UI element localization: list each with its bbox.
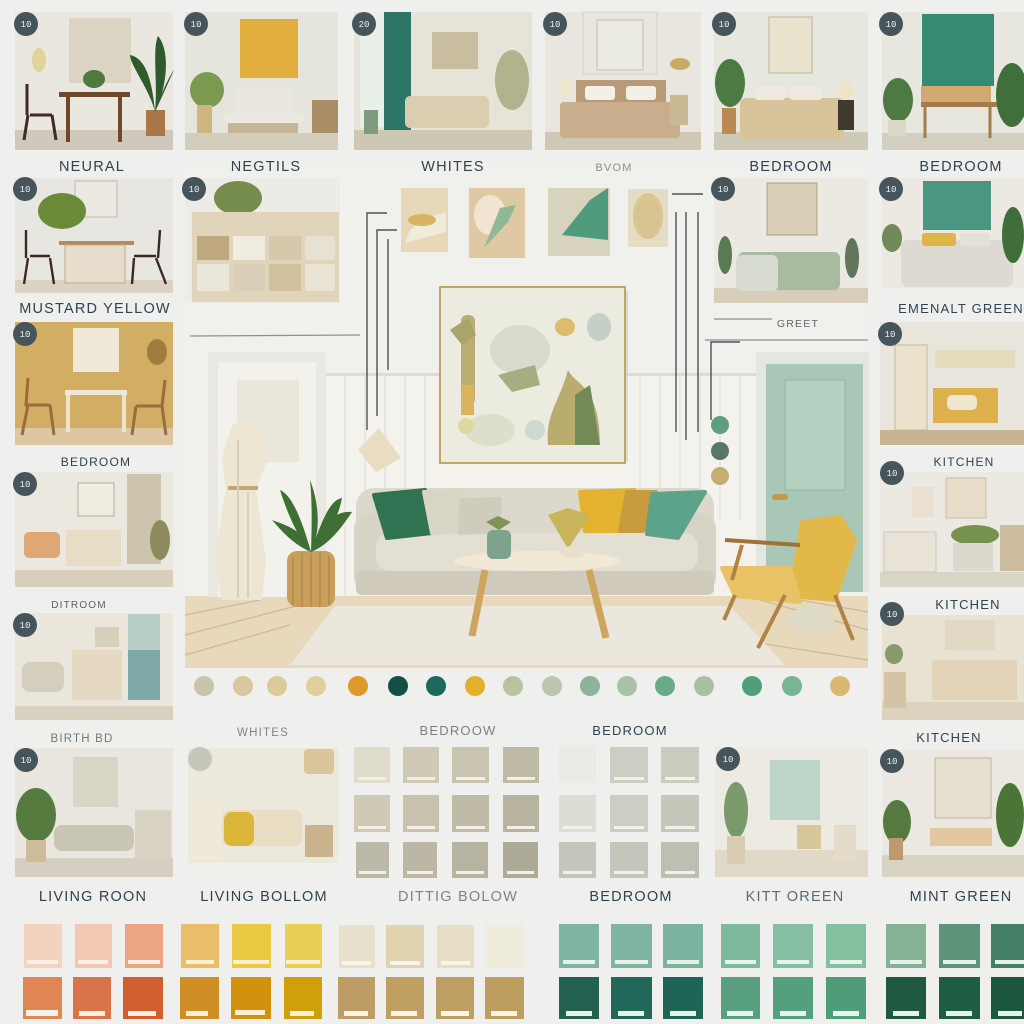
thumbnail: emerald room 2 — [882, 178, 1024, 288]
badge: 20 — [359, 20, 369, 30]
badge — [879, 177, 903, 201]
badge — [543, 12, 567, 36]
row of colour dots — [194, 676, 850, 696]
labels row 1: BEDROOM — [919, 159, 1003, 175]
swatches: sea green — [559, 924, 703, 1019]
coffee table — [454, 508, 620, 638]
badge — [352, 12, 376, 36]
armchair — [722, 517, 855, 648]
swatches: kitty green — [721, 924, 866, 1019]
badge — [14, 12, 38, 36]
badge: 10 — [191, 20, 201, 30]
thumbnail: yellow daybed — [880, 322, 1024, 445]
label: kitchen: KITCHEN — [935, 597, 1001, 612]
labels: bottom row: MINT GREEN — [910, 889, 1012, 905]
badge: 10 — [20, 621, 30, 631]
floor — [185, 596, 868, 668]
label: bedroom: BEDROOM — [61, 455, 131, 469]
thumbnail: bedroom 3 — [882, 12, 1024, 150]
labels row 1: WHITES — [421, 159, 485, 175]
badge — [879, 12, 903, 36]
badge: 10 — [21, 756, 31, 766]
badge: 10 — [885, 330, 895, 340]
labels row 1 — [59, 159, 1003, 175]
badge — [14, 748, 38, 772]
thumbnail: kitchen 2 — [882, 615, 1024, 720]
swatch dots on wall — [711, 416, 729, 485]
thumbnail: bedroom 1 — [545, 12, 701, 150]
badge — [880, 461, 904, 485]
thumbnail: neutral dining — [15, 12, 174, 150]
icon: potted plant — [272, 480, 352, 607]
labels: bottom row — [39, 889, 1012, 905]
badge — [711, 177, 735, 201]
labels row 1: BEDROOM — [749, 159, 833, 175]
thumbnail: living plants — [15, 748, 173, 877]
pendant lines — [367, 194, 740, 440]
label: dit room: DITROOM — [51, 600, 107, 611]
labels row 1: NEGTILS — [231, 159, 301, 175]
swatches: mustard — [180, 924, 322, 1019]
badge: 10 — [550, 20, 560, 30]
sofa — [354, 488, 716, 595]
swatches: coral — [23, 924, 163, 1019]
label: kitchen: KITCHEN — [933, 455, 995, 469]
badge — [712, 12, 736, 36]
thumbnail: bedroom 2 — [714, 12, 868, 150]
thumbnail: lounge — [15, 472, 173, 587]
swatch grid: neutral greys — [354, 747, 539, 878]
badge — [880, 602, 904, 626]
label: mustard yellow: MUSTARD YELLOW — [19, 301, 171, 317]
labels: bottom row: KITT OREEN — [746, 889, 844, 905]
labels: bottom row: DITTIG BOLOW — [398, 889, 518, 905]
dress mannequin — [214, 422, 268, 600]
thumbnail: mustard dining — [15, 178, 173, 293]
badge: 10 — [20, 330, 30, 340]
badge — [184, 12, 208, 36]
badge: 10 — [20, 480, 30, 490]
badge: 10 — [887, 757, 897, 767]
badge — [182, 177, 206, 201]
thumbnail: yellow seating — [188, 747, 338, 863]
left door — [208, 352, 326, 597]
label: whites: WHITES — [237, 727, 289, 739]
badge: 10 — [189, 185, 199, 195]
thumbnail: kitchen 3 — [882, 750, 1024, 877]
thumbnail: pastel room — [15, 613, 173, 720]
thumbnail: emerald room 1 — [714, 178, 868, 303]
label: emerald green: EMENALT GREEN — [898, 301, 1024, 316]
badge: 10 — [20, 185, 30, 195]
badge — [716, 747, 740, 771]
badge: 10 — [719, 20, 729, 30]
badge — [13, 322, 37, 346]
small wall prints — [401, 188, 668, 258]
swatch grid: soft greys — [559, 745, 699, 878]
rug — [290, 606, 785, 665]
badge: 10 — [887, 610, 897, 620]
label: bedroow: BEDROOW — [419, 723, 497, 738]
badge: 10 — [723, 755, 733, 765]
thumbnail: mint room — [715, 747, 868, 877]
thumbnail: shelf — [185, 178, 340, 303]
labels: bottom row: LIVING ROON — [39, 889, 147, 905]
label: kitchen: KITCHEN — [916, 730, 982, 745]
badge: 10 — [886, 185, 896, 195]
swatches: mint green — [886, 924, 1024, 1019]
thumbnail: neutrals sofa — [185, 12, 338, 150]
thumbnail: mustard wall — [15, 322, 173, 445]
labels: bottom row: LIVING BOLLOM — [200, 889, 328, 905]
badge — [880, 749, 904, 773]
badge: 10 — [887, 469, 897, 479]
labels row 1: NEURAL — [59, 159, 125, 175]
right door — [756, 352, 869, 592]
pendant lamp — [358, 428, 401, 472]
thumbnail: whites bedroom — [354, 12, 532, 150]
badge — [13, 613, 37, 637]
label: greet: GREET — [777, 318, 819, 330]
artwork: large framed botanical print — [440, 287, 628, 463]
badge: 10 — [886, 20, 896, 30]
badge — [878, 322, 902, 346]
badge — [13, 177, 37, 201]
badge: 10 — [718, 185, 728, 195]
panel: central living room — [185, 170, 869, 668]
labels: bottom row: BEDROOM — [589, 889, 673, 905]
label: birth bed: BIRTH BD — [50, 733, 114, 745]
labels row 1: BVOM — [595, 162, 633, 174]
badge: 10 — [21, 20, 31, 30]
thumbnail: kitchen 1 — [880, 472, 1024, 587]
swatches: sand — [338, 925, 524, 1019]
label: bedroom: BEDROOM — [592, 723, 668, 738]
badge — [13, 472, 37, 496]
